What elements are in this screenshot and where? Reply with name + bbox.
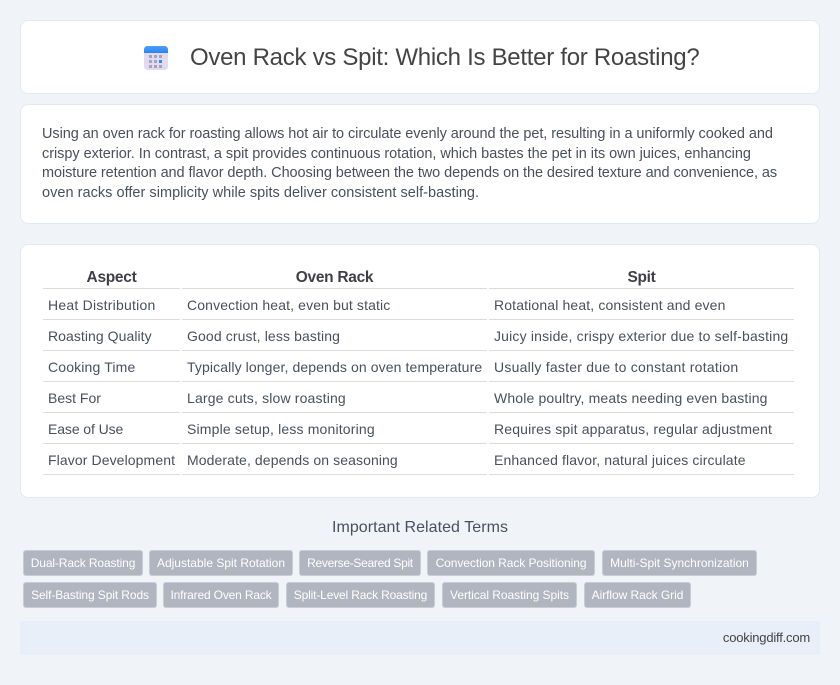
footer bar bbox=[20, 621, 820, 655]
related terms tags: Self-Basting Spit Rods bbox=[31, 588, 149, 602]
related terms tags: Split-Level Rack Roasting bbox=[294, 588, 427, 602]
comparison table: Good crust, less basting bbox=[187, 328, 340, 344]
intro text: crispy exterior. In contrast, a spit provides continuous rotation, which bastes the pet in its own juices, enhancing bbox=[42, 146, 751, 162]
comparison table: Heat Distribution bbox=[48, 297, 156, 313]
comparison table: Juicy inside, crispy exterior due to self-basting bbox=[494, 328, 788, 344]
related terms tags bbox=[23, 550, 757, 608]
comparison table panel bbox=[20, 244, 820, 498]
related terms tags: Dual-Rack Roasting bbox=[31, 556, 135, 570]
comparison table: Cooking Time bbox=[48, 359, 135, 375]
comparison table: Whole poultry, meats needing even basting bbox=[494, 390, 768, 406]
related terms tags: Adjustable Spit Rotation bbox=[157, 556, 285, 570]
related terms tags: Infrared Oven Rack bbox=[170, 588, 272, 602]
comparison table: Typically longer, depends on oven temperature bbox=[187, 359, 482, 375]
comparison table: Oven Rack bbox=[296, 269, 373, 286]
related terms tags: Multi-Spit Synchronization bbox=[610, 556, 749, 570]
comparison table: Large cuts, slow roasting bbox=[187, 390, 346, 406]
header panel bbox=[20, 20, 820, 94]
comparison table: Convection heat, even but static bbox=[187, 297, 390, 313]
comparison table: Aspect bbox=[87, 269, 136, 286]
comparison table: Enhanced flavor, natural juices circulate bbox=[494, 452, 746, 468]
comparison table: Best For bbox=[48, 390, 101, 406]
icon: calendar bbox=[144, 46, 168, 70]
intro text: oven racks offer simplicity while spits deliver consistent self-basting. bbox=[42, 184, 479, 200]
comparison table: Ease of Use bbox=[48, 421, 123, 437]
title: Oven Rack vs Spit: Which Is Better for Roasting? bbox=[190, 44, 699, 71]
intro text: moisture retention and flavor depth. Choosing between the two depends on the desired texture and convenience, as bbox=[42, 165, 777, 181]
intro text bbox=[42, 126, 777, 200]
related terms tags: Convection Rack Positioning bbox=[436, 556, 586, 570]
related terms tags: Airflow Rack Grid bbox=[592, 588, 683, 602]
comparison table: Spit bbox=[627, 269, 656, 286]
comparison table: Moderate, depends on seasoning bbox=[187, 452, 398, 468]
comparison table: Roasting Quality bbox=[48, 328, 152, 344]
intro text: Using an oven rack for roasting allows hot air to circulate evenly around the pet, resulting in a uniformly cooked and bbox=[42, 126, 773, 142]
comparison table: Simple setup, less monitoring bbox=[187, 421, 375, 437]
related terms tags: Vertical Roasting Spits bbox=[450, 588, 569, 602]
comparison table: Usually faster due to constant rotation bbox=[494, 359, 738, 375]
comparison table: Rotational heat, consistent and even bbox=[494, 297, 726, 313]
comparison table: Requires spit apparatus, regular adjustment bbox=[494, 421, 772, 437]
comparison table: Flavor Development bbox=[48, 452, 175, 468]
intro panel bbox=[20, 104, 820, 224]
related terms tags: Reverse-Seared Spit bbox=[307, 556, 413, 570]
footer source: cookingdiff.com bbox=[723, 630, 810, 645]
related terms heading: Important Related Terms bbox=[332, 519, 508, 536]
